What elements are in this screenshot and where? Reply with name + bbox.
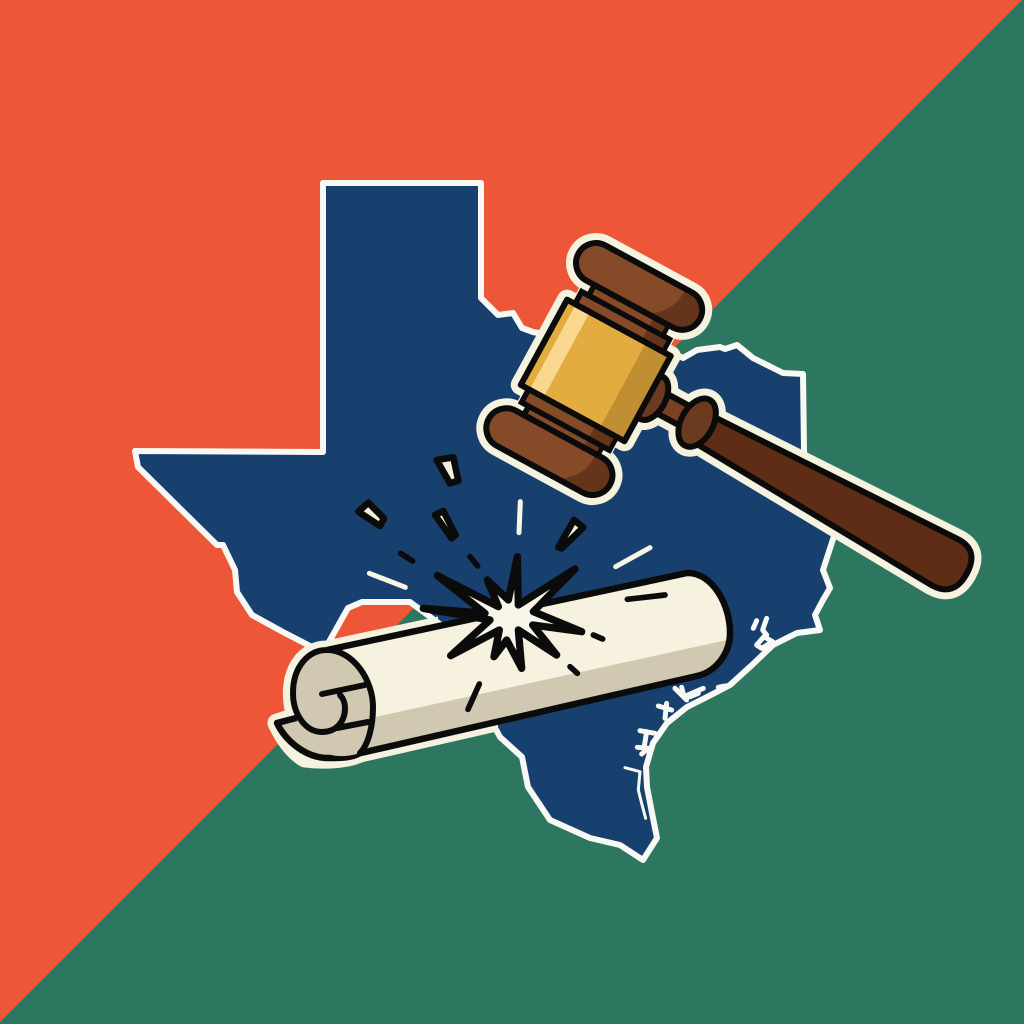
scroll: cream sticker outline: [268, 616, 498, 769]
scroll: shaded underside: [360, 640, 727, 753]
debris: fragments: [358, 457, 583, 548]
gavel: gold band: [521, 300, 671, 441]
gavel: bottom cap: [479, 401, 620, 502]
gavel: cream sticker outline: [479, 236, 1022, 672]
debris: white spark lines: [369, 502, 650, 587]
scroll: body outline: [327, 573, 730, 755]
gavel: [479, 236, 1022, 672]
gavel: handle: [692, 409, 979, 597]
scroll: spiral lines: [293, 650, 373, 753]
scroll: [277, 573, 730, 759]
gavel: neck: [646, 388, 697, 429]
gavel: upper collar: [575, 279, 676, 352]
gavel: handle collar: [671, 392, 724, 453]
gavel: lower collar: [516, 388, 617, 461]
gavel: block knob: [628, 370, 675, 426]
scroll: body: [327, 573, 730, 753]
gavel: top cap: [569, 236, 709, 337]
debris: black dashes: [401, 553, 665, 709]
impact starburst: [423, 557, 582, 668]
debris: [358, 457, 665, 709]
scroll: rolled end: [293, 650, 373, 756]
map: Texas silhouette: [135, 183, 835, 860]
scroll: tail: [277, 717, 360, 758]
map: coastal islands: [625, 618, 773, 818]
